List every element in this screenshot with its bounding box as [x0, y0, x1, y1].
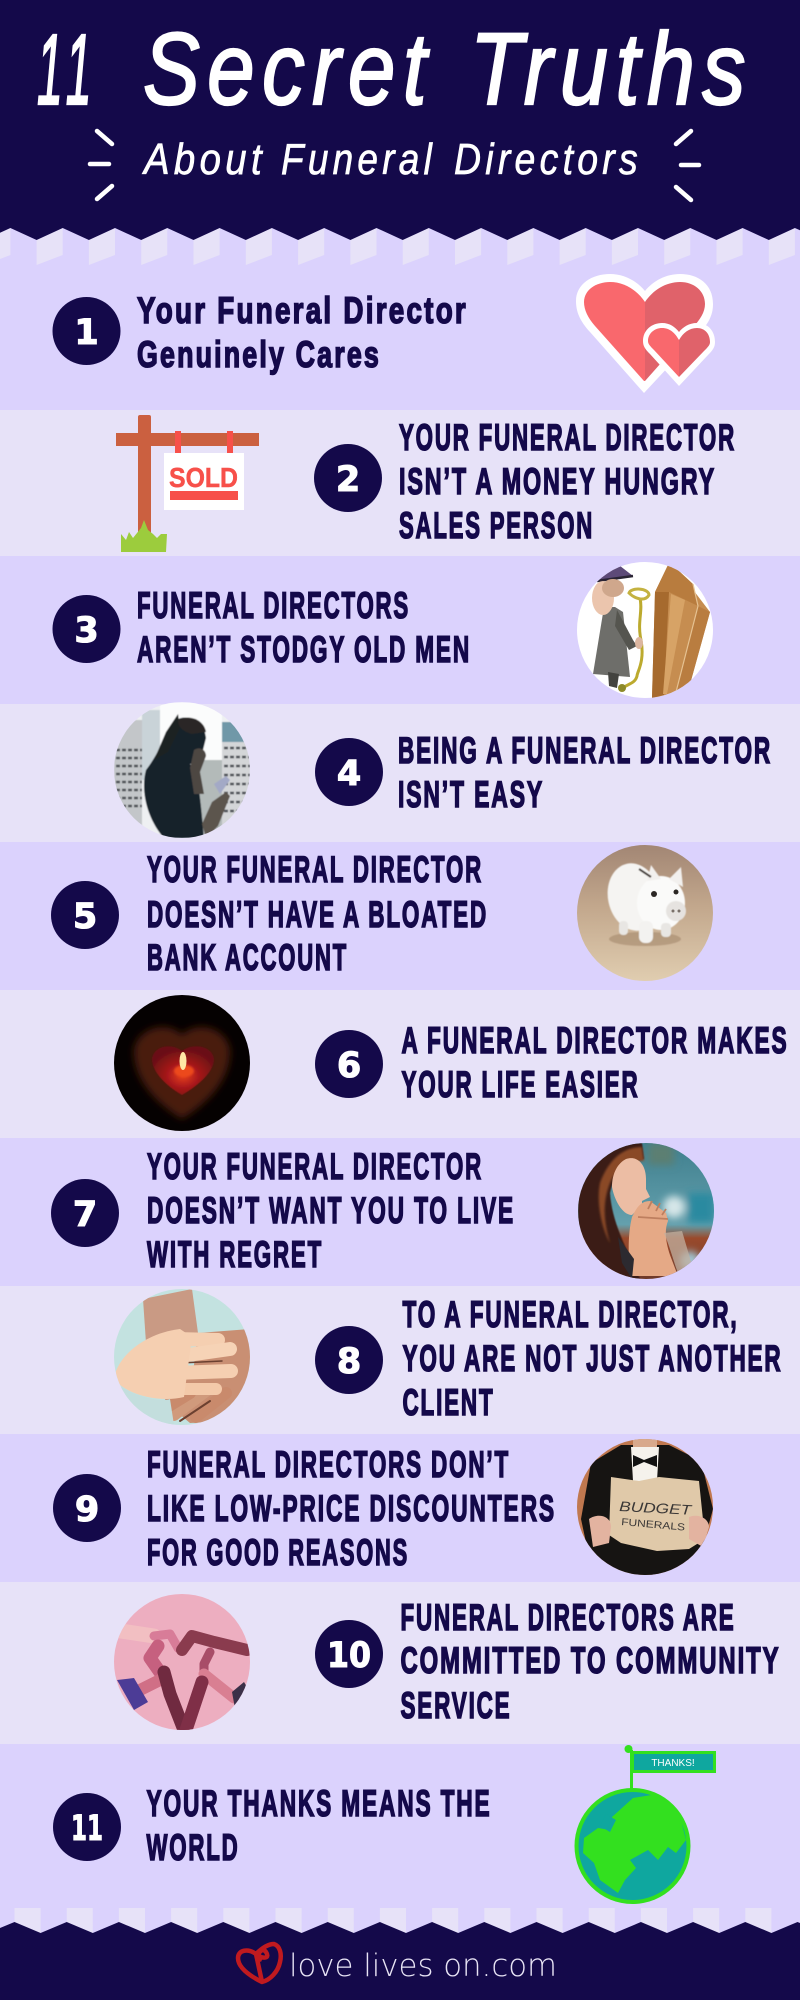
- item 11 text: [146, 1783, 492, 1868]
- number badge 9: [53, 1474, 121, 1542]
- number badge 11: 11: [71, 1809, 103, 1849]
- item 11 text: WORLD: [146, 1827, 240, 1868]
- item 2 text: [399, 417, 736, 546]
- icon: sold sign: SOLD: [169, 462, 238, 493]
- photo: hands held together: [114, 1289, 250, 1425]
- item 3 text: [137, 585, 471, 670]
- item 5: [51, 845, 713, 981]
- number badge 6: 6: [337, 1046, 361, 1086]
- number badge 10: [315, 1620, 383, 1688]
- item 7 text: [147, 1146, 515, 1275]
- photo: white piggy bank: [577, 845, 713, 981]
- number badge 9: 9: [75, 1490, 99, 1530]
- subtitle: About: [141, 135, 266, 184]
- item 9 text: LIKE LOW-PRICE DISCOUNTERS: [147, 1488, 556, 1529]
- number badge 7: [51, 1179, 119, 1247]
- title: Secret: [143, 12, 434, 126]
- number badge 2: [314, 444, 382, 512]
- subtitle: [141, 135, 642, 184]
- item 4 text: ISN’T EASY: [398, 774, 544, 815]
- icon: globe with thanks flag: [574, 1745, 716, 1904]
- item 7 text: WITH REGRET: [147, 1234, 323, 1275]
- subtitle: Directors: [454, 135, 642, 184]
- title: Truths: [470, 12, 753, 126]
- item 3 text: FUNERAL DIRECTORS: [137, 585, 410, 626]
- item 4: [114, 702, 772, 838]
- number badge 4: 4: [337, 754, 361, 794]
- number badge 7: 7: [73, 1195, 97, 1235]
- item 9 text: [147, 1444, 556, 1573]
- item 1: [52, 274, 715, 393]
- title: 11: [37, 14, 98, 126]
- photo: old man beside a coffin: [577, 562, 713, 698]
- photo: man in tuxedo holding budget funerals sign: FUNERALS: [621, 1517, 686, 1534]
- item 1 text: [137, 290, 468, 375]
- number badge 1: [52, 297, 120, 365]
- number badge 6: [315, 1030, 383, 1098]
- photo: woman praying: [578, 1143, 714, 1279]
- photo: hands forming a heart: [114, 1594, 250, 1730]
- item 5 text: [147, 849, 488, 978]
- photo: woman on a phone at a window: [114, 702, 250, 838]
- item 11: [53, 1745, 716, 1904]
- logo: heart and love lives on.com: love lives on.com: [289, 1948, 557, 1984]
- number badge 5: [51, 881, 119, 949]
- icon: globe with thanks flag: THANKS!: [651, 1758, 695, 1769]
- number badge 1: 1: [74, 313, 99, 353]
- number badge 2: 2: [336, 460, 360, 500]
- photo: candle in cupped hands: [114, 995, 250, 1131]
- item 5 text: BANK ACCOUNT: [147, 937, 348, 978]
- item 8 text: CLIENT: [402, 1382, 494, 1423]
- item 2: [116, 415, 736, 552]
- number badge 3: 3: [74, 611, 99, 651]
- number badge 8: 8: [337, 1342, 361, 1382]
- item 9 text: FUNERAL DIRECTORS DON’T: [147, 1444, 510, 1485]
- item 7 text: DOESN’T WANT YOU TO LIVE: [147, 1190, 515, 1231]
- photo: man in tuxedo holding budget funerals sign: BUDGET: [619, 1498, 693, 1518]
- item 6: [114, 995, 788, 1131]
- item 5 text: DOESN’T HAVE A BLOATED: [147, 894, 488, 935]
- number badge 5: 5: [73, 897, 97, 937]
- footer banner with zigzag edge: [0, 1908, 800, 2000]
- number badge 3: [52, 595, 120, 663]
- item 3 text: AREN’T STODGY OLD MEN: [137, 629, 471, 670]
- item 2 text: SALES PERSON: [399, 505, 594, 546]
- subtitle: Funeral: [281, 135, 436, 184]
- title: [37, 12, 753, 126]
- icon: sold sign: [116, 415, 259, 552]
- item 10: [114, 1594, 780, 1730]
- number badge 10: 10: [327, 1636, 371, 1676]
- header banner with zigzag edge: [0, 0, 800, 265]
- item 1 text: Genuinely Cares: [137, 334, 381, 375]
- photo: man in tuxedo holding budget funerals sign: [577, 1439, 713, 1575]
- item 3: [52, 562, 713, 698]
- item 5 text: YOUR FUNERAL DIRECTOR: [147, 849, 483, 890]
- item 1 text: Your Funeral Director: [137, 290, 468, 331]
- item 10 text: [400, 1597, 780, 1726]
- item 10 text: SERVICE: [400, 1685, 512, 1726]
- item 11 text: YOUR THANKS MEANS THE: [146, 1783, 492, 1824]
- item 6 text: [402, 1020, 788, 1105]
- item 6 text: YOUR LIFE EASIER: [402, 1064, 640, 1105]
- icon: two hearts: [576, 274, 715, 393]
- item 8: [114, 1289, 782, 1425]
- item 7 text: YOUR FUNERAL DIRECTOR: [147, 1146, 483, 1187]
- item 7: [51, 1143, 714, 1279]
- number badge 4: [315, 738, 383, 806]
- number badge 8: [315, 1326, 383, 1394]
- number badge 11: [53, 1793, 121, 1861]
- icon: subtitle rays: [90, 131, 699, 200]
- item 9 text: FOR GOOD REASONS: [147, 1532, 409, 1573]
- item 9: [53, 1439, 713, 1575]
- item 4 text: [398, 730, 772, 815]
- item 8 text: [402, 1294, 782, 1423]
